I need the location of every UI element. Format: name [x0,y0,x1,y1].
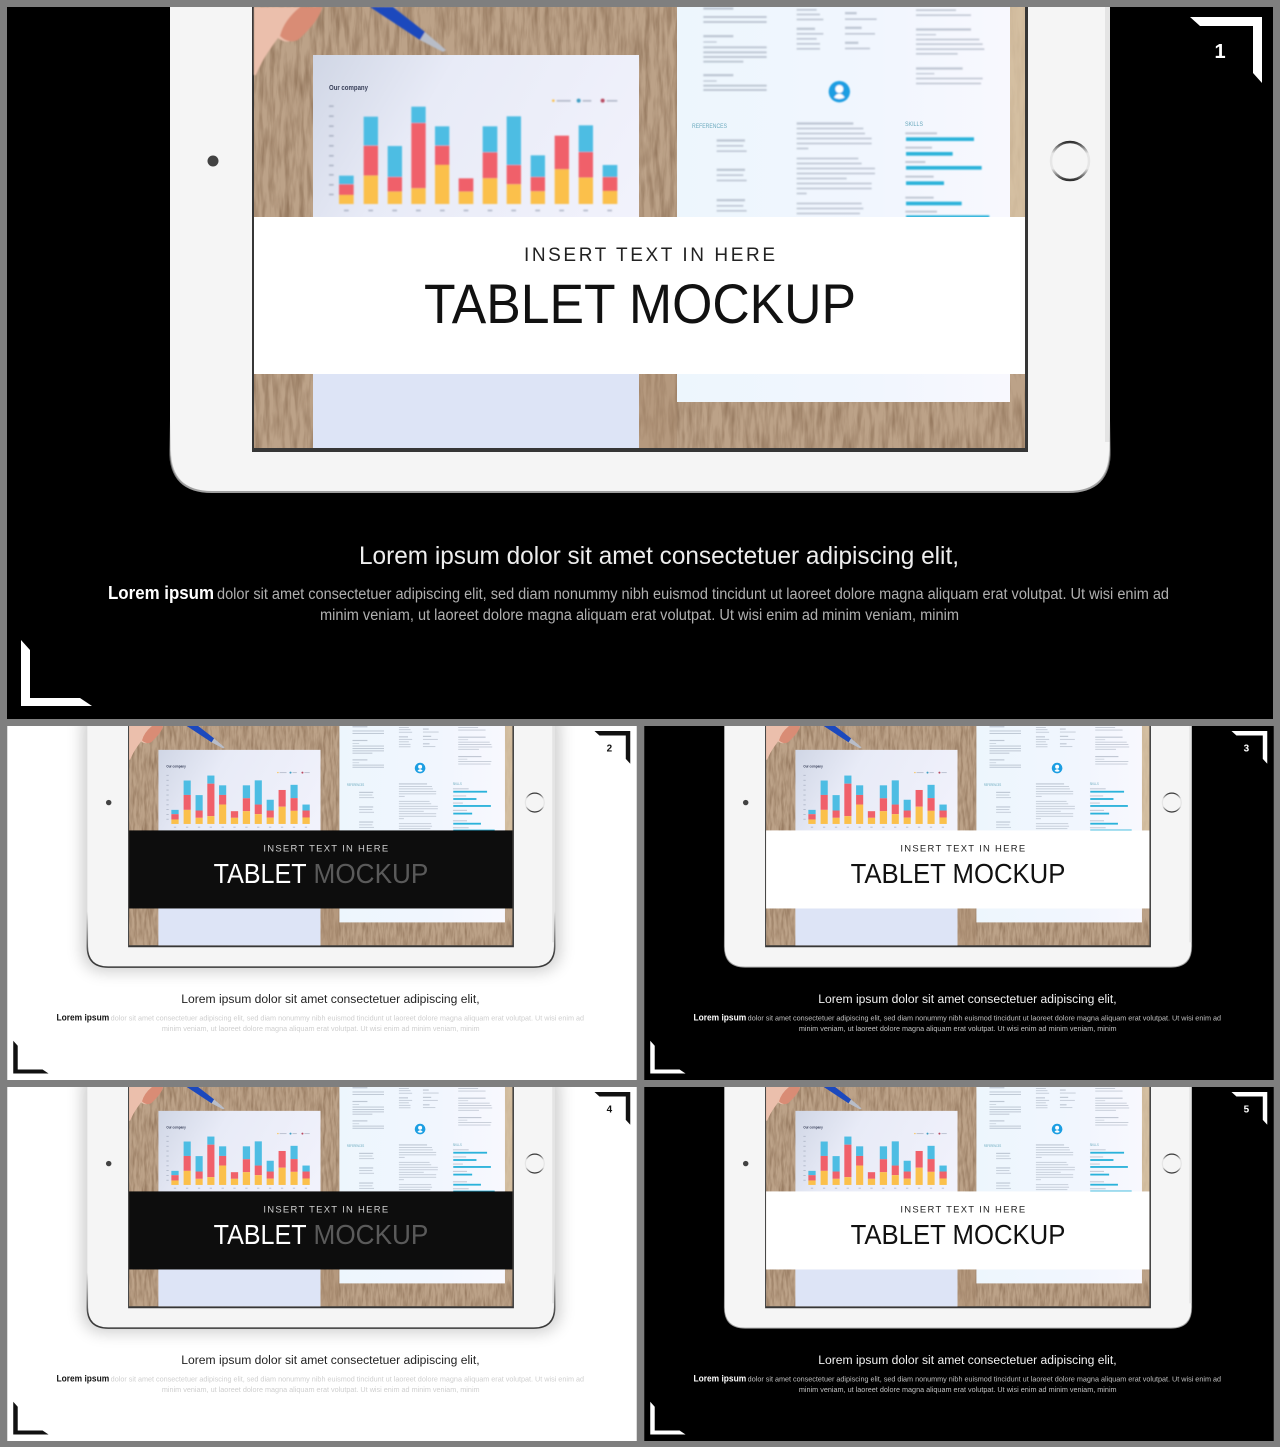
banner title: TABLET MOCKUP [851,1219,1065,1250]
page number: 3 [1244,743,1250,754]
caption body [56,1373,584,1394]
resume heading references: REFERENCES [347,1144,364,1148]
tablet rim [724,1292,1192,1328]
banner subtitle: INSERT TEXT IN HERE [900,843,1025,854]
caption heading: Lorem ipsum dolor sit amet consectetuer adipiscing elit, [818,1353,1117,1367]
panel: slide 1 [7,7,1273,719]
banner subtitle: INSERT TEXT IN HERE [263,843,388,854]
banner title first word: TABLET [214,1219,307,1250]
resume heading skills: SKILLS [453,1143,462,1147]
title banner [766,830,1149,908]
page number corner [594,1092,630,1125]
caption body: Lorem ipsum [108,583,214,603]
caption heading: Lorem ipsum dolor sit amet consectetuer adipiscing elit, [181,992,480,1006]
resume heading skills: SKILLS [905,121,924,128]
tablet rim [87,1272,555,1328]
resume heading references: REFERENCES [984,1144,1001,1148]
chart title: Our company [166,1125,186,1129]
caption body: Lorem ipsum [56,1373,109,1383]
corner bracket bottom left [650,1402,686,1435]
resume heading references: REFERENCES [347,783,364,787]
caption body: dolor sit amet consectetuer adipiscing elit, sed diam nonummy nibh euismod tincidunt ut laoreet dolore magna aliquam erat volutpat. Ut wisi enim ad [111,1013,584,1022]
panel: slide 5 [644,1087,1274,1441]
banner subtitle: INSERT TEXT IN HERE [263,1204,388,1215]
page number: 4 [607,1104,613,1115]
tablet rim [724,931,1192,967]
icon: tablet device [170,0,1110,492]
caption body: minim veniam, ut laoreet dolore magna aliquam erat volutpat. Ut wisi enim ad minim veniam, minim [320,607,959,624]
banner subtitle: INSERT TEXT IN HERE [900,1204,1025,1215]
caption body: dolor sit amet consectetuer adipiscing elit, sed diam nonummy nibh euismod tincidunt ut laoreet dolore magna aliquam erat volutpat. Ut wisi enim ad [748,1374,1221,1383]
resume heading references: REFERENCES [692,123,728,130]
icon: tablet device [724,1084,1192,1328]
caption body: minim veniam, ut laoreet dolore magna aliquam erat volutpat. Ut wisi enim ad minim veniam, minim [162,1385,480,1394]
chart title: Our company [329,85,368,92]
page number: 1 [1214,41,1226,63]
corner bracket bottom left [13,1402,49,1435]
page number corner [1231,1092,1267,1125]
caption body: minim veniam, ut laoreet dolore magna aliquam erat volutpat. Ut wisi enim ad minim veniam, minim [799,1385,1117,1394]
corner bracket bottom left [650,1041,686,1074]
caption body: Lorem ipsum [56,1012,109,1022]
banner subtitle: INSERT TEXT IN HERE [524,245,775,266]
resume heading skills: SKILLS [1090,1143,1099,1147]
corner bracket bottom left [13,1041,49,1074]
caption body [56,1012,584,1033]
resume heading skills: SKILLS [453,782,462,786]
tablet shadow [82,1069,560,1332]
caption body: dolor sit amet consectetuer adipiscing elit, sed diam nonummy nibh euismod tincidunt ut laoreet dolore magna aliquam erat volutpat. Ut wisi enim ad [217,586,1169,603]
page number: 2 [607,743,613,754]
page number corner [1231,731,1267,764]
title banner [129,830,512,908]
tablet shadow [82,708,560,971]
caption body [694,1373,1221,1394]
icon: tablet device [87,723,555,967]
tablet rim [87,911,555,967]
caption heading: Lorem ipsum dolor sit amet consectetuer adipiscing elit, [818,992,1117,1006]
panel: slide 4 [7,1087,637,1441]
tablet rim [170,420,1110,492]
caption body: dolor sit amet consectetuer adipiscing elit, sed diam nonummy nibh euismod tincidunt ut laoreet dolore magna aliquam erat volutpat. Ut wisi enim ad [111,1374,584,1383]
title banner [766,1191,1149,1269]
caption body: minim veniam, ut laoreet dolore magna aliquam erat volutpat. Ut wisi enim ad minim veniam, minim [162,1024,480,1033]
banner title first word: TABLET [214,858,307,889]
caption body: minim veniam, ut laoreet dolore magna aliquam erat volutpat. Ut wisi enim ad minim veniam, minim [799,1024,1117,1033]
caption body [694,1012,1221,1033]
resume heading skills: SKILLS [1090,782,1099,786]
banner title second word: MOCKUP [314,1219,428,1250]
caption body [108,583,1169,624]
caption heading: Lorem ipsum dolor sit amet consectetuer adipiscing elit, [181,1353,480,1367]
icon: tablet device [724,723,1192,967]
page number: 5 [1244,1104,1250,1115]
title banner [254,217,1025,374]
chart title: Our company [166,764,186,768]
chart title: Our company [803,764,823,768]
page number corner [594,731,630,764]
banner title second word: MOCKUP [314,858,428,889]
caption body: Lorem ipsum [693,1012,746,1022]
icon: tablet device [87,1084,555,1328]
banner title: TABLET MOCKUP [424,272,856,335]
chart title: Our company [803,1125,823,1129]
caption body: dolor sit amet consectetuer adipiscing elit, sed diam nonummy nibh euismod tincidunt ut laoreet dolore magna aliquam erat volutpat. Ut wisi enim ad [748,1013,1221,1022]
caption heading: Lorem ipsum dolor sit amet consectetuer adipiscing elit, [359,542,959,570]
page number corner [1190,17,1262,83]
title banner [129,1191,512,1269]
corner bracket bottom left [21,640,92,706]
panel: slide 2 [7,726,637,1080]
caption body: Lorem ipsum [693,1373,746,1383]
panel: slide 3 [644,726,1274,1080]
resume heading references: REFERENCES [984,783,1001,787]
banner title: TABLET MOCKUP [851,858,1065,889]
